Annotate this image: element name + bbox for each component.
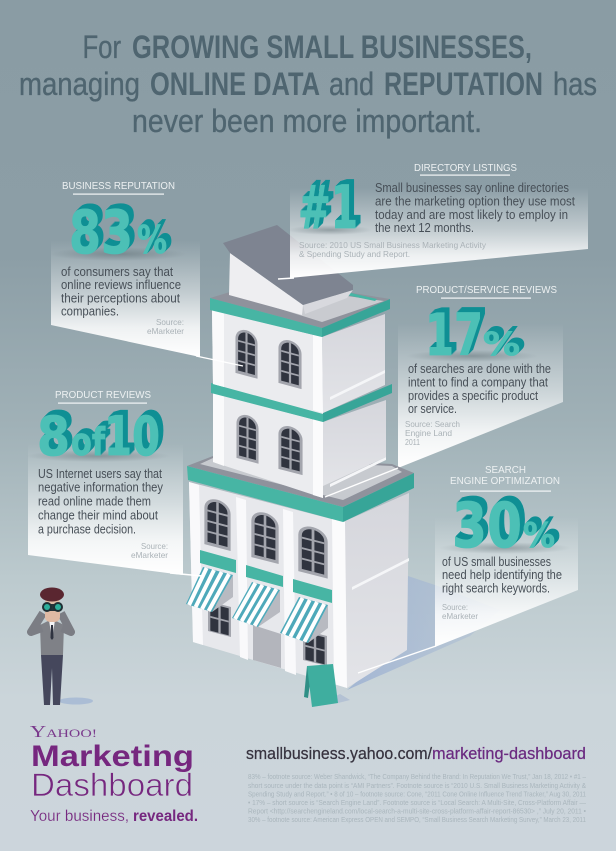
panel: business reputation: BUSINESS REPUTATION xyxy=(62,180,175,192)
logo: Yahoo Marketing Dashboard: revealed. xyxy=(133,808,198,825)
panel: product service reviews: 17 xyxy=(425,301,483,369)
panel: search engine optimization: of US small businesses xyxy=(442,554,551,569)
pointer lines xyxy=(170,278,436,673)
logo: Yahoo Marketing Dashboard: Dashboard xyxy=(31,767,193,803)
panel: search engine optimization: SEARCH xyxy=(485,464,526,476)
panel: search engine optimization: Source: xyxy=(442,602,468,612)
panel: business reputation: 83 xyxy=(69,198,133,268)
ground floor windows xyxy=(204,496,328,666)
footnotes xyxy=(248,772,587,824)
panel: product service reviews: or service. xyxy=(408,401,457,416)
panel: product reviews: read online made them xyxy=(38,494,151,508)
panel: product service reviews: provides a specific product xyxy=(408,388,538,403)
website url: marketing-dashboard xyxy=(432,744,586,763)
person with binoculars xyxy=(31,588,93,705)
panel: directory listings: #1 xyxy=(298,173,358,243)
title: REPUTATION xyxy=(384,66,543,102)
logo: Yahoo Marketing Dashboard xyxy=(30,722,198,825)
logo: Yahoo Marketing Dashboard: Marketing xyxy=(31,740,194,773)
panel: directory listings: Small businesses say online directories xyxy=(375,180,569,195)
middle floor xyxy=(213,393,386,498)
panel: product service reviews: Source: Search xyxy=(405,419,460,429)
panel: business reputation xyxy=(50,180,200,357)
roof deck and cornice xyxy=(210,292,390,337)
top floor xyxy=(212,310,385,414)
panel: search engine optimization: 30 xyxy=(452,489,522,562)
website url: smallbusiness.yahoo.com/ xyxy=(246,744,432,763)
panel: product service reviews: % xyxy=(483,325,520,363)
ground floor xyxy=(186,456,414,688)
panel: business reputation: of consumers say that xyxy=(61,264,173,279)
panel: directory listings: today and are most likely to employ in xyxy=(375,207,568,222)
panel: product reviews: eMarketer xyxy=(131,550,168,560)
panel: product reviews: 8 xyxy=(37,405,70,468)
panel: product service reviews: intent to find a company that xyxy=(408,374,548,390)
panel: product reviews: change their mind about xyxy=(38,508,158,522)
panel: product service reviews: 2011 xyxy=(405,437,420,447)
title: never been more important. xyxy=(132,103,482,139)
logo: Yahoo Marketing Dashboard: Y AHOO! xyxy=(30,722,97,741)
title xyxy=(19,29,597,139)
panel: product reviews: of xyxy=(71,420,105,464)
panel: search engine optimization: % xyxy=(523,516,555,556)
teal bands xyxy=(200,550,332,603)
panel: search engine optimization: need help identifying the xyxy=(442,567,562,582)
panel: product service reviews xyxy=(398,284,563,468)
panel: directory listings: are the marketing option they use most xyxy=(375,194,575,208)
panel: directory listings: Source: 2010 US Small Business Marketing Activity xyxy=(299,240,487,250)
panel: product service reviews: of searches are done with the xyxy=(408,361,551,376)
title: ONLINE DATA xyxy=(150,66,320,102)
panel: product reviews: 10 xyxy=(104,405,160,468)
panel: directory listings xyxy=(288,162,588,278)
panel: product reviews: Source: xyxy=(141,541,168,551)
panel: product reviews: a purchase decision. xyxy=(38,522,136,536)
sign board xyxy=(304,664,350,707)
logo: Yahoo Marketing Dashboard: Your business, xyxy=(30,808,129,825)
website url xyxy=(246,744,586,763)
panel: search engine optimization xyxy=(435,464,578,647)
panel: directory listings: DIRECTORY LISTINGS xyxy=(414,162,517,174)
panel: search engine optimization: ENGINE OPTIMIZATION xyxy=(450,475,560,487)
middle teal band xyxy=(211,383,392,422)
panel: business reputation: % xyxy=(137,218,167,262)
title: and xyxy=(329,66,374,102)
title: managing xyxy=(19,66,140,102)
panel: directory listings: the next 12 months. xyxy=(375,220,474,235)
title: For xyxy=(82,29,121,65)
panel: product reviews: PRODUCT REVIEWS xyxy=(55,389,151,401)
building shadow xyxy=(347,575,500,690)
panel: business reputation: their perceptions about xyxy=(61,290,180,306)
panel: search engine optimization: right search keywords. xyxy=(442,580,550,596)
panel: directory listings: & Spending Study and Report. xyxy=(299,249,410,259)
panel: business reputation: online reviews influence xyxy=(61,277,181,292)
title: has xyxy=(553,66,597,102)
panel: product service reviews: PRODUCT/SERVICE REVIEWS xyxy=(416,284,557,296)
panel: product reviews: negative information they xyxy=(38,480,163,494)
panel: product service reviews: Engine Land xyxy=(405,428,452,438)
panel: product reviews: US Internet users say that xyxy=(38,466,162,481)
awning 1 xyxy=(186,567,233,612)
panel: search engine optimization: eMarketer xyxy=(442,611,478,621)
awning 2 xyxy=(232,582,280,627)
building xyxy=(186,225,414,707)
attic and roof xyxy=(223,225,353,315)
panel: business reputation: companies. xyxy=(61,304,119,318)
panel: product reviews xyxy=(26,389,183,575)
awning 3 xyxy=(280,597,328,643)
panel: business reputation: Source: xyxy=(156,317,184,327)
panel: business reputation: eMarketer xyxy=(147,326,184,336)
door xyxy=(253,625,281,668)
